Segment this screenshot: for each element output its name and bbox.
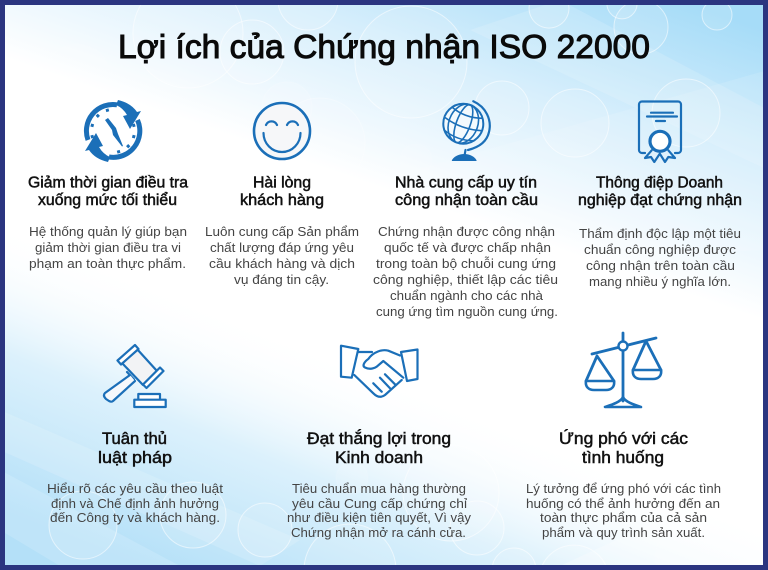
- body text: Chứng nhận mở ra cánh cửa.: [291, 525, 466, 540]
- body text: phạm an toàn thực phẩm.: [29, 256, 186, 271]
- body text: mang nhiều ý nghĩa lớn.: [589, 274, 731, 289]
- body text: trong toàn bộ chuỗi cung ứng: [376, 256, 556, 271]
- body text: Tiêu chuẩn mua hàng thường: [292, 481, 466, 496]
- body text: [205, 224, 359, 287]
- icon: scales: [586, 333, 661, 407]
- icon: certificate: [639, 102, 681, 162]
- heading: [98, 430, 172, 467]
- panel: nhà cung cấp uy tín: [373, 98, 558, 319]
- body text: [47, 481, 223, 525]
- heading: Giảm thời gian điều tra: [28, 174, 188, 192]
- body text: công nghiệp, thiết lập các tiêu: [373, 272, 558, 287]
- icon: globe: [438, 98, 490, 161]
- heading: [307, 429, 451, 467]
- heading: tình huống: [582, 449, 664, 467]
- heading: Thông điệp Doanh: [596, 174, 723, 192]
- panel: thông điệp doanh nghiệp: [578, 102, 742, 289]
- body text: toàn thực phẩm của cả sản: [540, 510, 707, 525]
- body text: [287, 481, 471, 540]
- heading: luật pháp: [98, 449, 172, 467]
- body text: yêu cầu Cung cấp chứng chỉ: [292, 496, 467, 511]
- heading: Ứng phó với các: [559, 429, 688, 448]
- heading: [578, 174, 742, 209]
- body text: chuẩn công nghiệp được: [584, 242, 737, 257]
- body text: Hệ thống quản lý giúp bạn: [29, 224, 187, 239]
- body text: Luôn cung cấp Sản phẩm: [205, 224, 359, 239]
- heading: Nhà cung cấp uy tín: [395, 174, 537, 192]
- body text: chuẩn ngành cho các nhà: [390, 288, 544, 303]
- body text: định và Chế định ảnh hưởng: [51, 496, 219, 511]
- body text: công nhận trên toàn cầu: [586, 258, 735, 273]
- heading: nghiệp đạt chứng nhận: [578, 192, 742, 209]
- body text: chất lượng đáp ứng yêu: [210, 240, 354, 255]
- body text: Chứng nhận được công nhận: [378, 224, 555, 239]
- body text: [29, 224, 187, 271]
- icon: handshake: [341, 346, 418, 397]
- icon: clock with arrows: [85, 100, 141, 162]
- icon: gavel: [104, 345, 166, 407]
- heading: [395, 174, 538, 209]
- heading: Tuân thủ: [102, 430, 167, 448]
- heading: khách hàng: [240, 192, 324, 209]
- title: Lợi ích của Chứng nhận ISO 22000: [118, 28, 650, 65]
- heading: Kinh doanh: [335, 449, 423, 467]
- body text: Thẩm định độc lập một tiêu: [579, 226, 741, 241]
- heading: Hài lòng: [253, 174, 311, 192]
- body text: giảm thời gian điều tra vi: [35, 240, 181, 255]
- body text: Hiểu rõ các yêu cầu theo luật: [47, 481, 223, 496]
- panel: giảm thời gian điều tra: [28, 100, 188, 271]
- body text: vụ đáng tin cậy.: [234, 272, 329, 287]
- body text: phẩm và quy trình sản xuất.: [542, 525, 705, 540]
- body text: [373, 224, 558, 319]
- heading: công nhận toàn cầu: [395, 192, 538, 209]
- heading: [559, 429, 688, 467]
- heading: xuống mức tối thiểu: [38, 192, 177, 209]
- icon: smiley: [254, 103, 310, 159]
- panel: ứng phó với các tình huống: [526, 333, 721, 540]
- heading: Đạt thắng lợi trong: [307, 429, 451, 448]
- body text: [526, 481, 721, 540]
- body text: đến Công ty và khách hàng.: [50, 510, 220, 525]
- body text: như điều kiện tiên quyết, Vì vậy: [287, 510, 471, 525]
- panel: đạt thắng lợi trong kinh doanh: [287, 346, 471, 540]
- body text: cầu khách hàng và dịch: [209, 256, 355, 271]
- body text: [579, 226, 741, 289]
- heading: [240, 174, 324, 209]
- heading: [28, 174, 188, 209]
- body text: Lý tưởng để ứng phó với các tình: [526, 481, 721, 496]
- body text: huống có thể ảnh hưởng đến an: [526, 496, 720, 511]
- panel: hài lòng khách hàng: [205, 103, 359, 287]
- body text: cung ứng tìm nguồn cung ứng.: [376, 304, 558, 319]
- body text: quốc tế và được chấp nhận: [384, 240, 551, 255]
- panel: tuân thủ luật pháp: [47, 345, 223, 525]
